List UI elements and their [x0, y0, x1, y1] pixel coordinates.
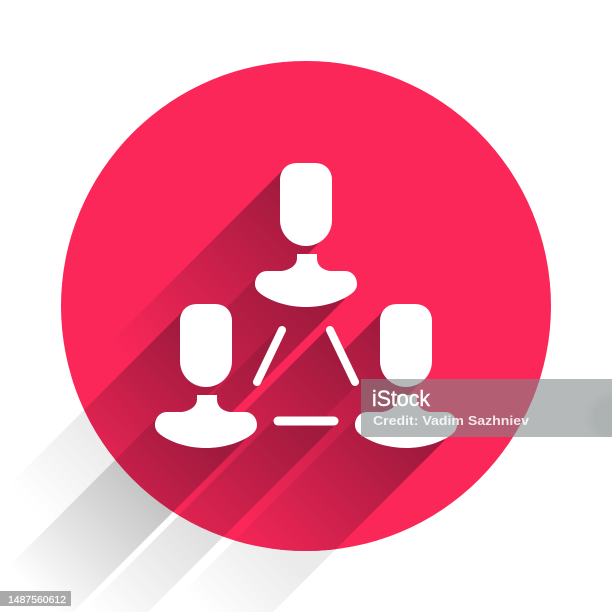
long shadow inside the circle	[72, 170, 445, 551]
connector: left link	[257, 330, 282, 382]
icon: three connected people	[155, 163, 457, 448]
watermark logo: iStock	[372, 386, 431, 411]
red circle	[61, 61, 551, 551]
icon: right person	[355, 304, 457, 448]
watermark band	[361, 379, 612, 437]
watermark credit: Credit: Vadim Sazhniev	[373, 414, 529, 428]
image id number: 1487560612	[8, 594, 66, 606]
long shadow outside the circle	[0, 309, 445, 612]
image id tag	[0, 591, 71, 606]
icon: left person	[155, 304, 257, 448]
icon: top person	[255, 163, 357, 307]
connector: right link	[330, 330, 355, 382]
connector: bottom link	[278, 416, 334, 426]
